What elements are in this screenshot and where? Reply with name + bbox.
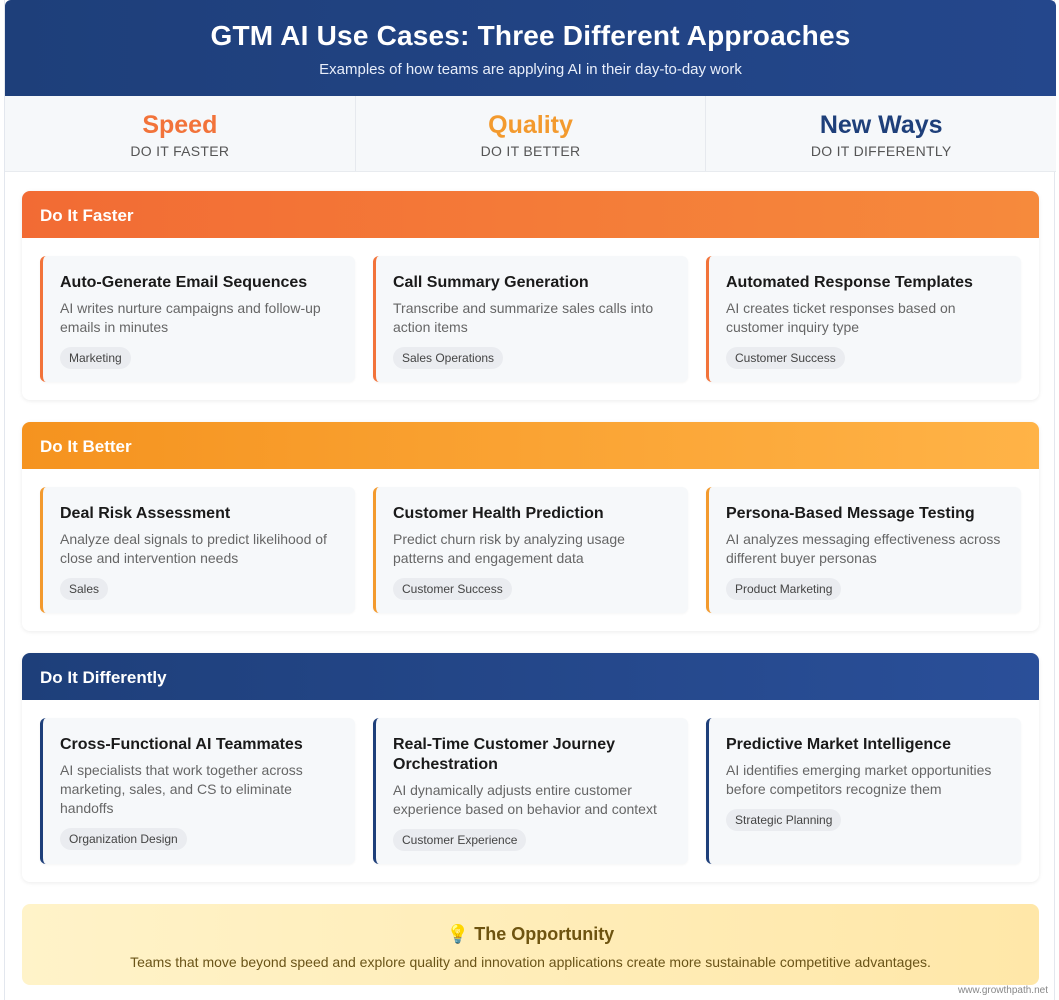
card: persona testing: AI analyzes messaging effectiveness across different buyer personas <box>726 531 1000 566</box>
panel: do it better <box>22 422 1039 631</box>
card: persona testing: Product Marketing <box>735 582 832 596</box>
card: deal risk: Sales <box>69 582 99 596</box>
card: journey orchestration: Real-Time Customer Journey Orchestration <box>393 736 615 773</box>
header: GTM AI Use Cases: Three Different Approaches <box>210 20 850 51</box>
tab: speed <box>5 96 356 171</box>
panel: do it differently: Do It Differently <box>40 668 167 687</box>
card: deal risk: Deal Risk Assessment <box>60 505 230 522</box>
card: response templates: AI creates ticket responses based on customer inquiry type <box>726 300 956 335</box>
card: call summary: Transcribe and summarize sales calls into action items <box>393 300 653 335</box>
card: customer health: Customer Success <box>402 582 503 596</box>
card: customer health: Predict churn risk by analyzing usage patterns and engagement data <box>393 531 625 566</box>
card: call summary: Call Summary Generation <box>393 274 589 291</box>
card: market intelligence: Predictive Market Intelligence <box>726 736 951 753</box>
card: customer health: Customer Health Prediction <box>393 505 604 522</box>
card: persona testing <box>706 487 1021 613</box>
panel: do it faster: Do It Faster <box>40 206 134 225</box>
card: call summary: Sales Operations <box>402 351 494 365</box>
card: email sequences: AI writes nurture campaigns and follow-up emails in minutes <box>60 300 321 335</box>
tab: quality: DO IT BETTER <box>481 143 580 159</box>
card: market intelligence <box>706 718 1021 864</box>
card: email sequences: Marketing <box>69 351 122 365</box>
panel: do it differently <box>22 653 1039 882</box>
tab: new ways: DO IT DIFFERENTLY <box>811 143 952 159</box>
card: ai teammates: Organization Design <box>69 832 178 846</box>
tab: speed: DO IT FASTER <box>130 143 229 159</box>
tab: speed: Speed <box>142 111 217 139</box>
callout: opportunity: Teams that move beyond speed and explore quality and innovation applications create more sustainable competitive advantages. <box>130 954 931 970</box>
card: deal risk: Analyze deal signals to predict likelihood of close and intervention needs <box>60 531 327 566</box>
card: email sequences <box>40 256 355 382</box>
card: response templates <box>706 256 1021 382</box>
header: Examples of how teams are applying AI in their day-to-day work <box>319 61 742 78</box>
card: journey orchestration: AI dynamically adjusts entire customer experience based on behavior and context <box>393 782 657 817</box>
card: journey orchestration: Customer Experience <box>402 833 517 847</box>
card: market intelligence: Strategic Planning <box>735 813 832 827</box>
header <box>5 0 1056 96</box>
tab: new ways <box>811 111 952 159</box>
callout: opportunity: 💡 The Opportunity <box>447 924 614 944</box>
card: journey orchestration <box>373 718 688 864</box>
tab: new ways: New Ways <box>820 111 943 139</box>
card: response templates: Automated Response Templates <box>726 274 973 291</box>
card: response templates: Customer Success <box>735 351 836 365</box>
card: deal risk <box>40 487 355 613</box>
card: call summary <box>373 256 688 382</box>
card: ai teammates <box>40 718 355 864</box>
card: customer health <box>373 487 688 613</box>
callout: opportunity <box>22 904 1039 985</box>
card: ai teammates: AI specialists that work together across marketing, sales, and CS to eliminate handoffs <box>60 762 303 816</box>
card: email sequences: Auto-Generate Email Sequences <box>60 274 307 291</box>
tab: quality <box>356 96 706 171</box>
card: ai teammates: Cross-Functional AI Teammates <box>60 736 303 753</box>
tabs <box>5 96 1056 172</box>
card: market intelligence: AI identifies emerging market opportunities before competitors recognize them <box>726 762 991 797</box>
panel: do it better: Do It Better <box>40 437 132 456</box>
watermark: www.growthpath.net <box>958 985 1048 996</box>
tab: quality: Quality <box>488 111 573 139</box>
card: persona testing: Persona-Based Message Testing <box>726 505 975 522</box>
panel: do it faster <box>22 191 1039 400</box>
